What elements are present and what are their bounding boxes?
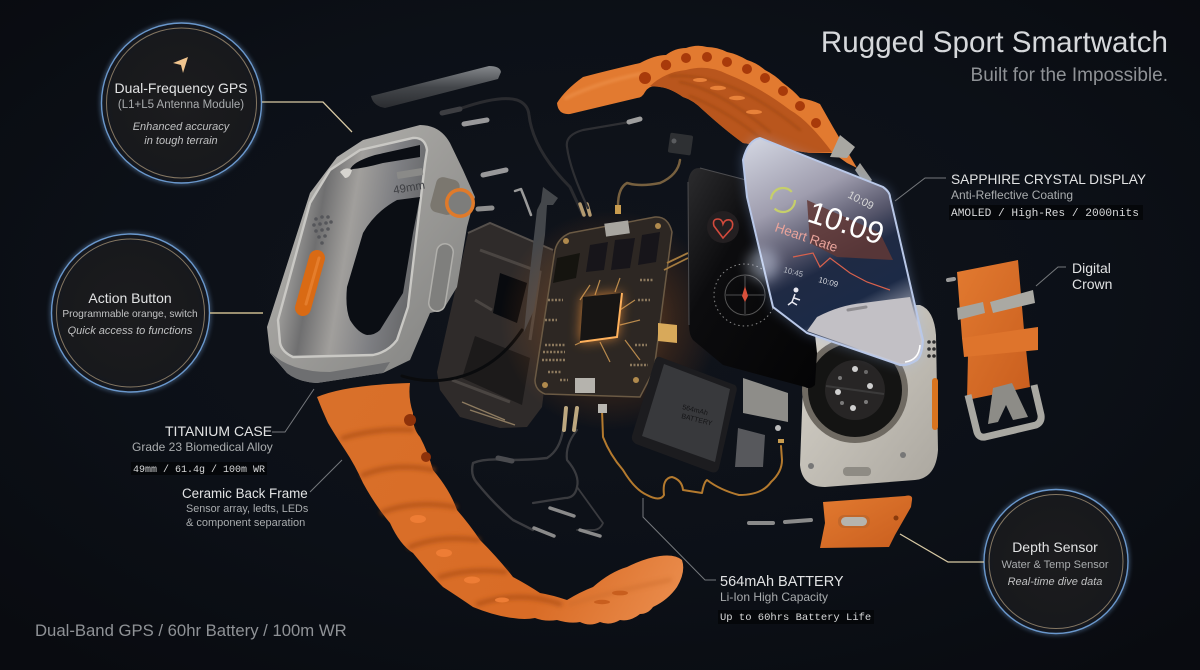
leader: sapphire display xyxy=(895,178,946,201)
icon: crown dial xyxy=(429,176,475,218)
leader: ceramic back frame xyxy=(310,460,342,492)
circle callout: action button: Action Button xyxy=(88,290,172,306)
callout: digital crown: Crown xyxy=(1072,276,1112,292)
circle callout: GPS: Enhanced accuracy xyxy=(133,121,231,133)
circle callout: GPS: Dual-Frequency GPS xyxy=(114,80,248,96)
circle callout: action button: Programmable orange, switch xyxy=(62,309,198,320)
leader: GPS xyxy=(262,102,352,132)
circle callout: depth sensor: Depth Sensor xyxy=(1012,539,1098,555)
circle callout: GPS: in tough terrain xyxy=(144,135,218,147)
battery xyxy=(632,357,737,472)
title: Rugged Sport Smartwatch xyxy=(821,26,1168,59)
strap: top orange band xyxy=(557,46,872,186)
time readout: 10:09 xyxy=(804,194,888,252)
footer spec line: Dual-Band GPS / 60hr Battery / 100m WR xyxy=(35,621,347,640)
watch back xyxy=(800,305,938,487)
loose wires and screws, top xyxy=(442,99,693,215)
heart rate label and chart xyxy=(773,220,890,290)
callout: ceramic back frame xyxy=(182,486,309,529)
leader: titanium case xyxy=(272,389,314,432)
leader: action button xyxy=(210,312,263,314)
strap: bottom orange band xyxy=(317,383,683,624)
callout: ceramic back frame: Sensor array, ledts, LEDs xyxy=(186,503,309,515)
sapphire crystal glass xyxy=(743,138,923,365)
circle callout: depth sensor: Real-time dive data xyxy=(1008,576,1102,588)
icon: GPS arrow xyxy=(173,57,188,73)
connectors and lower wires xyxy=(472,253,811,536)
AMOLED display panel xyxy=(688,168,817,388)
callout: digital crown: Digital xyxy=(1072,260,1111,276)
callout: battery: Up to 60hrs Battery Life xyxy=(720,612,871,624)
callout: titanium case: 49mm / 61.4g / 100m WR xyxy=(133,464,265,476)
titanium case: 49mm xyxy=(392,180,426,197)
callout: titanium case xyxy=(131,423,273,476)
battery: BATTERY xyxy=(681,413,713,428)
leader: depth sensor xyxy=(900,534,984,562)
heart rate label and chart: Heart Rate xyxy=(773,220,840,255)
callout: sapphire crystal display: Anti-Reflective Coating xyxy=(951,188,1073,202)
long internal bracket arm xyxy=(524,187,558,332)
top dark slab xyxy=(371,66,501,108)
circuit board xyxy=(500,210,720,430)
callout: ceramic back frame: Ceramic Back Frame xyxy=(182,486,308,501)
title: Built for the Impossible. xyxy=(971,65,1168,86)
callout: sapphire crystal display: AMOLED / High-Res / 2000nits xyxy=(951,208,1139,220)
callout: sapphire crystal display xyxy=(949,172,1146,220)
circle callout: depth sensor xyxy=(984,490,1128,634)
callout: battery xyxy=(718,574,874,624)
icon: heart badge xyxy=(707,211,739,243)
callout: sapphire crystal display: SAPPHIRE CRYSTAL DISPLAY xyxy=(951,172,1146,187)
titanium case xyxy=(267,125,475,383)
circle callout: GPS: (L1+L5 Antenna Module) xyxy=(118,99,244,111)
internal frame xyxy=(402,223,556,428)
heart rate label and chart: 10:45 xyxy=(782,265,805,279)
battery: 564mAh xyxy=(682,404,709,417)
callout: titanium case: Grade 23 Biomedical Alloy xyxy=(132,440,273,454)
circle callout: GPS xyxy=(102,23,262,183)
time readout: 10:09 xyxy=(846,189,876,213)
leader: digital crown xyxy=(1036,267,1066,286)
circle callout: action button: Quick access to functions xyxy=(68,325,193,337)
activity ring xyxy=(771,188,795,212)
right loose strap piece xyxy=(948,260,1041,437)
small orange lug piece xyxy=(820,496,912,548)
callout: titanium case: TITANIUM CASE xyxy=(165,423,272,439)
leader: battery xyxy=(643,498,716,580)
haptic motor xyxy=(735,378,788,467)
icon: runner xyxy=(788,288,800,305)
callout: battery: Li-Ion High Capacity xyxy=(720,590,828,604)
title xyxy=(821,26,1168,86)
circle callout: depth sensor: Water & Temp Sensor xyxy=(1002,559,1109,571)
heart rate label and chart: 10:09 xyxy=(817,275,840,289)
compass dial xyxy=(714,264,776,326)
circle callout: action button xyxy=(52,234,210,392)
callout: ceramic back frame: & component separation xyxy=(186,517,305,529)
callout: battery: 564mAh BATTERY xyxy=(720,574,844,590)
callout: digital crown xyxy=(1072,260,1112,292)
